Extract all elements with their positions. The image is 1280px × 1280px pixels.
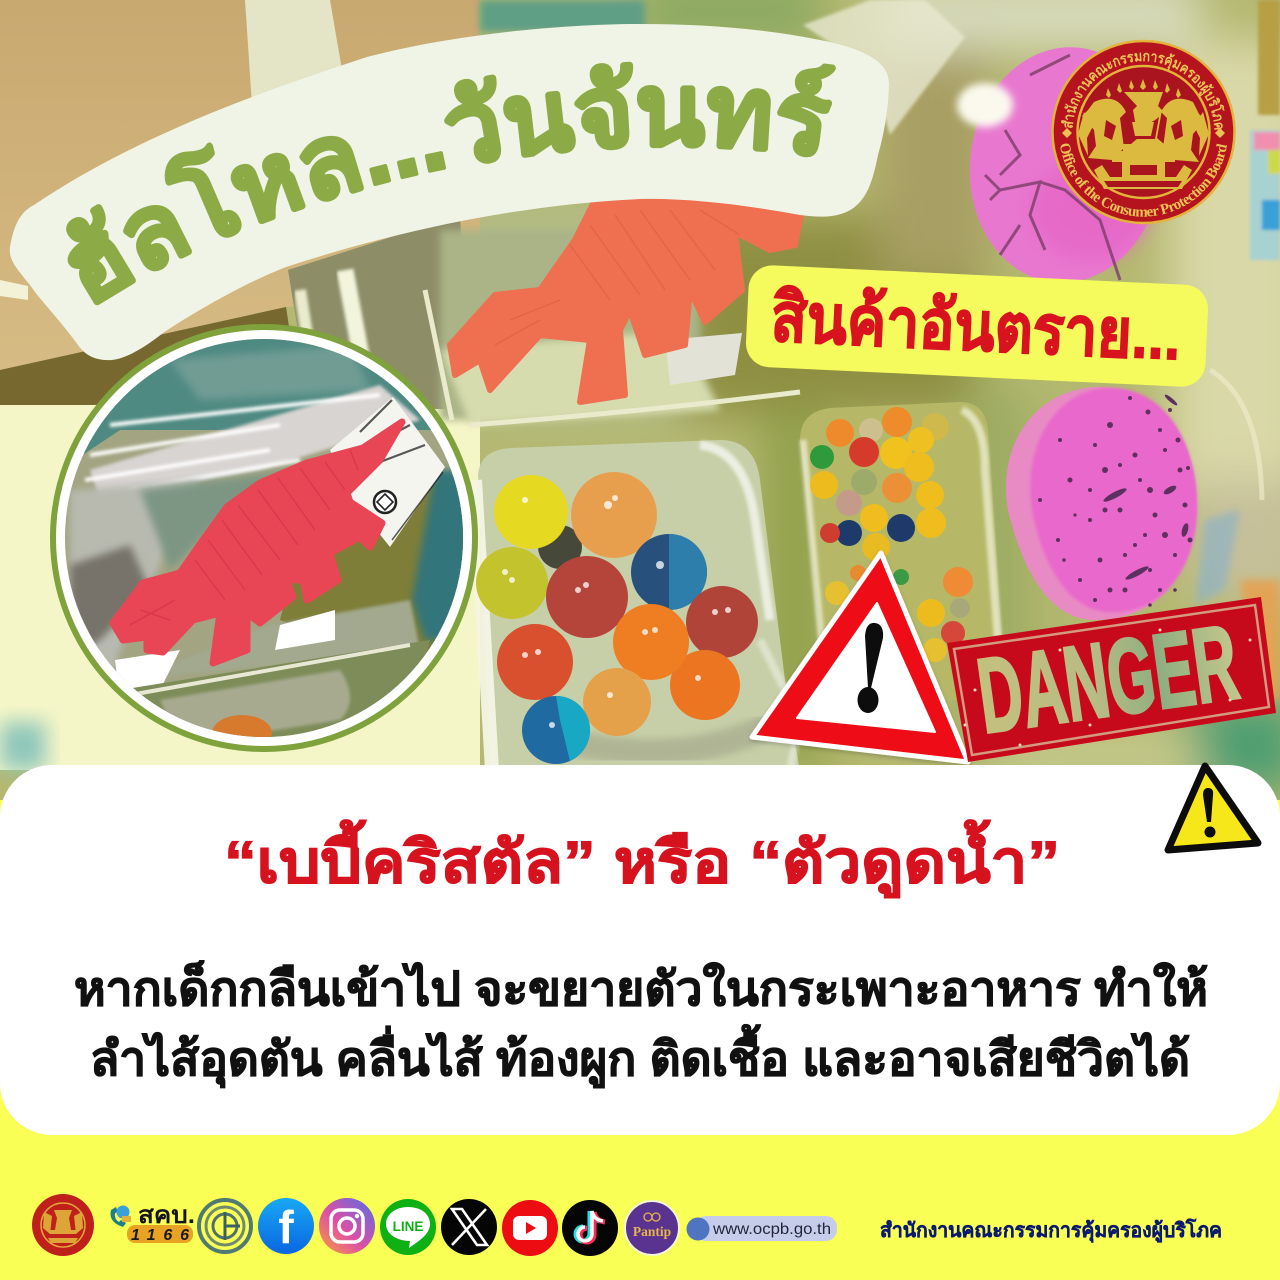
- body line 1: หากเด็กกลืนเข้าไป จะขยายตัวในกระเพาะอาหาร ทำให้: [74, 959, 1208, 1015]
- background photo of toy package: [0, 0, 1280, 800]
- body line 2: ลำไส้อุดตัน คลื่นไส้ ท้องผูก ติดเชื้อ และอาจเสียชีวิตได้: [90, 1024, 1190, 1089]
- LINE icon: [380, 1199, 436, 1255]
- hotline logo: 1166: [131, 1227, 189, 1244]
- cardboard box and table edge: [0, 0, 480, 370]
- pink cracked egg: [952, 47, 1158, 280]
- subtitle text: สินค้าอันตราย...: [769, 279, 1183, 375]
- seal English text: Office of the Consumer Protection Board: [1060, 144, 1227, 217]
- Pantip icon: [625, 1201, 679, 1255]
- beads tray: [800, 402, 1002, 700]
- white info panel: [0, 765, 1280, 1280]
- right side streaks: [1195, 510, 1240, 605]
- rainbow strip right edge: [1250, 0, 1280, 260]
- website pill: [686, 1216, 837, 1241]
- seal Thai text: สำนักงานคณะกรรมการคุ้มครองผู้บริโภค: [1061, 52, 1226, 130]
- Pantip icon: Pantip: [633, 1224, 671, 1239]
- title text: ฮัลโหล...วันจันทร์: [66, 62, 836, 306]
- LINE icon: LINE: [393, 1219, 423, 1234]
- instagram icon: [319, 1198, 375, 1254]
- upper dinosaur: [450, 190, 803, 402]
- stamp flecks: [964, 628, 1252, 746]
- exclamation mark: [858, 623, 883, 713]
- small warning triangle: [1168, 766, 1258, 850]
- white tags: [803, 0, 965, 135]
- X icon: [441, 1199, 497, 1255]
- TikTok icon: [562, 1200, 618, 1256]
- heading: “เบบี้คริสตัล” หรือ “ตัวดูดน้ำ”: [224, 820, 1060, 898]
- seal emblem: [1062, 79, 1225, 189]
- hotline logo: สคบ.: [138, 1202, 195, 1229]
- facebook icon: [258, 1198, 314, 1254]
- facebook icon: f: [278, 1201, 294, 1253]
- yellow subtitle pill: [745, 264, 1209, 388]
- OCPB circle logo: [199, 1200, 251, 1252]
- pink speckled egg: [1006, 387, 1197, 620]
- danger stamp: [947, 597, 1276, 762]
- large warning triangle: [752, 553, 968, 762]
- seal logo top right: [1051, 40, 1236, 224]
- plastic box around upper dinosaur: [288, 215, 470, 410]
- footer band with logos: [32, 1194, 1222, 1256]
- balls tray: [475, 440, 800, 770]
- website pill: www.ocpb.go.th: [712, 1221, 831, 1238]
- title pill: [10, 24, 889, 360]
- inset dinosaur: [113, 422, 402, 663]
- hotline logo: [110, 1202, 195, 1244]
- inset circle photo of red dinosaur: [53, 327, 475, 751]
- plastic strip top: [245, 0, 342, 105]
- organisation name: สำนักงานคณะกรรมการคุ้มครองผู้บริโภค: [880, 1218, 1222, 1244]
- footer seal: [32, 1194, 94, 1256]
- YouTube icon: [502, 1200, 558, 1256]
